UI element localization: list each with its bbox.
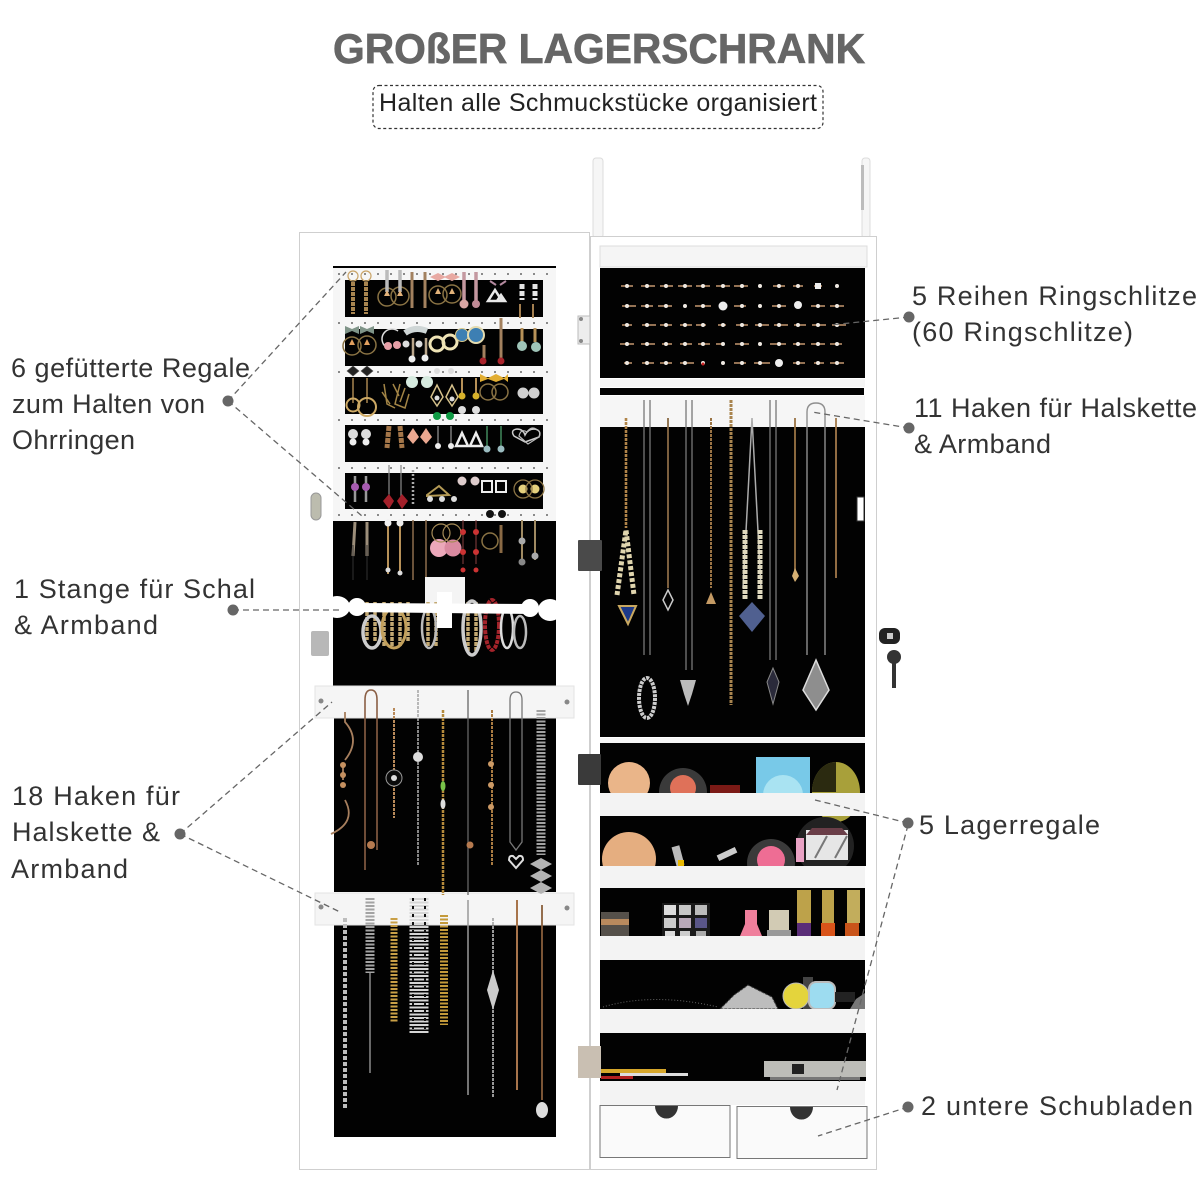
hinges (578, 540, 602, 1078)
drawer handles (655, 1106, 813, 1120)
callout: scarf rod (14, 574, 340, 640)
earring panel background (333, 266, 556, 686)
top shelf (600, 246, 867, 267)
upper necklaces (331, 690, 552, 895)
callout: ring slots: (60 Ringschlitze) (912, 317, 1133, 347)
cabinet (300, 158, 901, 1170)
subtitle box: Halten alle Schmuckstücke organisiert (379, 89, 817, 117)
ring tray (600, 268, 865, 378)
callout: ring slots: 5 Reihen Ringschlitze (912, 281, 1197, 311)
drawers (600, 1106, 867, 1158)
lock and key (879, 628, 901, 688)
cosmetics shelf 3 (601, 890, 860, 936)
earrings (343, 270, 544, 580)
wall hooks (593, 158, 870, 238)
right edge latch (857, 497, 864, 521)
shelf backgrounds (600, 738, 866, 1081)
callout: storage shelves (815, 800, 1100, 1090)
callout: scarf rod: 1 Stange für Schal (14, 574, 255, 604)
necklace panels (315, 686, 574, 1137)
necklace hook bar (600, 396, 865, 427)
row 5 (351, 465, 544, 509)
cosmetics shelf 4 (603, 977, 865, 1009)
callout: drawers (818, 1091, 1193, 1136)
cosmetics shelf 1 (608, 757, 860, 822)
divider (600, 379, 865, 387)
callout: necklace hooks right: & Armband (914, 429, 1051, 459)
callout: earring shelves: zum Halten von (12, 389, 205, 419)
subtitle box (373, 86, 823, 128)
scarf rod holder (425, 577, 465, 607)
row 6 (353, 510, 538, 580)
door hardware (311, 316, 590, 656)
storage shelves (600, 793, 865, 1105)
callout: necklace hooks left (11, 702, 340, 912)
cosmetics shelf 5 (601, 1061, 866, 1080)
callout: scarf rod: & Armband (14, 610, 158, 640)
callout: earring shelves: 6 gefütterte Regale (11, 353, 250, 383)
necklace panel (600, 427, 865, 737)
earring shelves (333, 268, 556, 521)
callout: ring slots (830, 281, 1197, 347)
cosmetics shelf 2 (602, 817, 854, 887)
row 3 (346, 366, 540, 416)
callout: necklace hooks right (812, 393, 1197, 459)
callout: necklace hooks left: 18 Haken für (12, 781, 180, 811)
lower necklaces (345, 898, 548, 1118)
necklaces (617, 400, 836, 718)
row 4 (348, 412, 540, 452)
callout: storage shelves: 5 Lagerregale (919, 810, 1100, 840)
row 1 (348, 270, 535, 318)
callout: earring shelves: Ohrringen (12, 425, 135, 455)
scarf rod (324, 592, 562, 628)
panel: right cabinet (590, 236, 876, 1170)
row 2 (343, 318, 541, 364)
callout: necklace hooks left: Halskette & (12, 817, 160, 847)
callout: necklace hooks left: Armband (11, 854, 128, 884)
bracelets on bar (363, 600, 526, 655)
title: GROßER LAGERSCHRANK (333, 25, 865, 72)
callout: necklace hooks right: 11 Haken für Halskette (914, 393, 1197, 423)
panel: left door (300, 232, 590, 1170)
callout: drawers: 2 untere Schubladen (921, 1091, 1193, 1121)
hook bars (315, 686, 574, 925)
callout: earring shelves (11, 272, 362, 516)
